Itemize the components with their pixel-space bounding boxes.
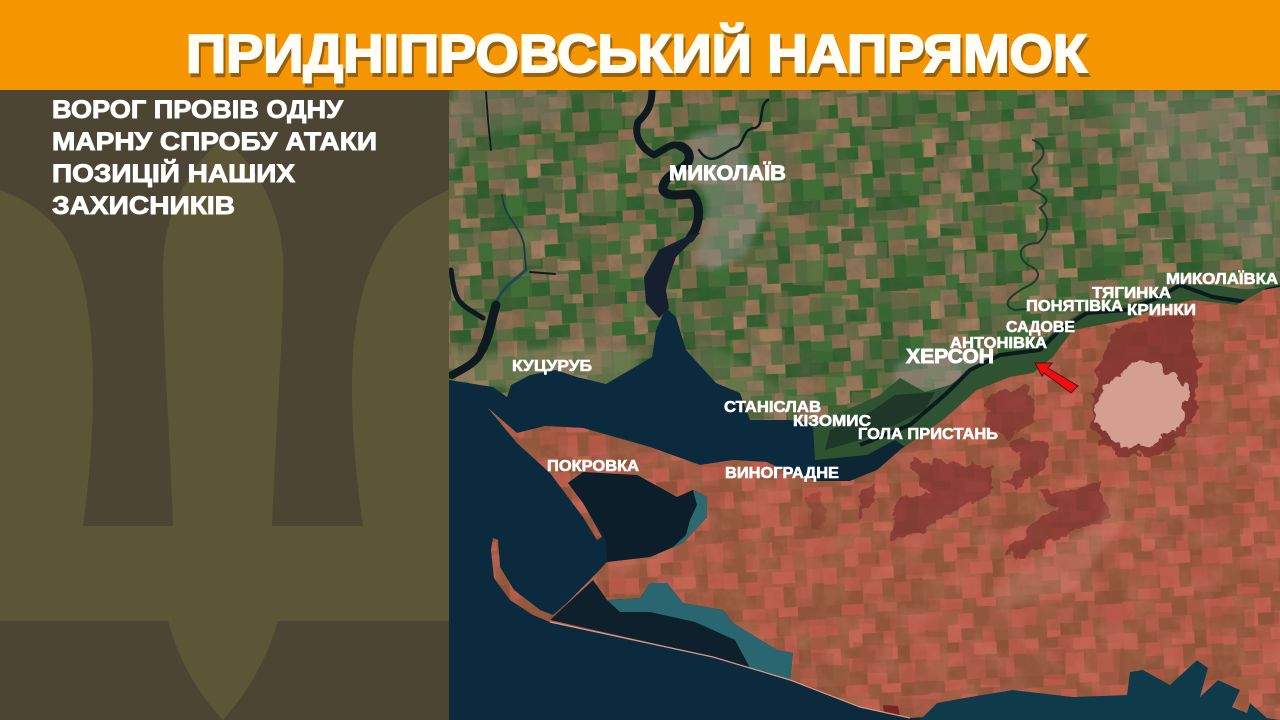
free territory land [449,90,1280,424]
labels: settlements: ВИНОГРАДНЕ [725,465,839,482]
text: enemy attack summary: МАРНУ СПРОБУ АТАКИ [52,128,377,156]
patch: coastal salt pan [883,705,900,716]
title: ПРИДНІПРОВСЬКИЙ НАПРЯМОК [186,23,1088,84]
labels: settlements: ТЯГИНКА [1092,285,1171,302]
Oleshky sands centre [1093,364,1187,449]
labels: settlements: САДОВЕ [1006,319,1075,336]
sand bar: southern coast [550,622,910,718]
labels: settlements: КРИНКИ [1127,302,1196,319]
estuary: Southern Bug lower [644,233,700,318]
map: Kherson and Mykolaiv region [449,90,1280,720]
labels: settlements: МИКОЛАЇВ [669,162,786,185]
labels: settlements [512,162,1278,482]
icon: trident emblem [0,138,449,720]
labels: settlements: АНТОНІВКА [950,335,1047,352]
occupied territory [449,280,1280,720]
labels: settlements: КУЦУРУБ [512,358,592,375]
lagoon: Yahorlyk bay [568,472,707,562]
pale ridge [990,480,1125,610]
lagoon: Tendra bay [550,580,793,680]
labels: settlements: СТАНІСЛАВ [724,399,821,416]
cities: urban areas [690,125,990,395]
forest patches [805,385,1110,560]
text: enemy attack summary [52,96,377,220]
labels: settlements: ГОЛА ПРИСТАНЬ [858,426,998,443]
arrow: attack direction [1035,363,1078,393]
Oleshky sands ring [1090,312,1197,458]
panel: left background [0,90,449,720]
rivers: Southern Bug and tributaries [451,90,1047,375]
panel: header band [0,0,1280,90]
sea: southeast coast tint [920,660,1280,720]
labels: settlements: ПОКРОВКА [547,458,639,475]
labels: settlements: КІЗОМИС [793,413,871,430]
text: enemy attack summary: ВОРОГ ПРОВІВ ОДНУ [52,96,343,124]
labels: settlements: МИКОЛАЇВКА [1166,270,1278,288]
labels: settlements: ХЕРСОН [906,346,994,368]
text: enemy attack summary: ЗАХИСНИКІВ [52,192,235,220]
delta: Dnipro river strip [813,283,1280,481]
sea [449,310,920,720]
text: enemy attack summary: ПОЗИЦІЙ НАШИХ [52,158,295,188]
labels: settlements: ПОНЯТІВКА [1026,298,1123,315]
